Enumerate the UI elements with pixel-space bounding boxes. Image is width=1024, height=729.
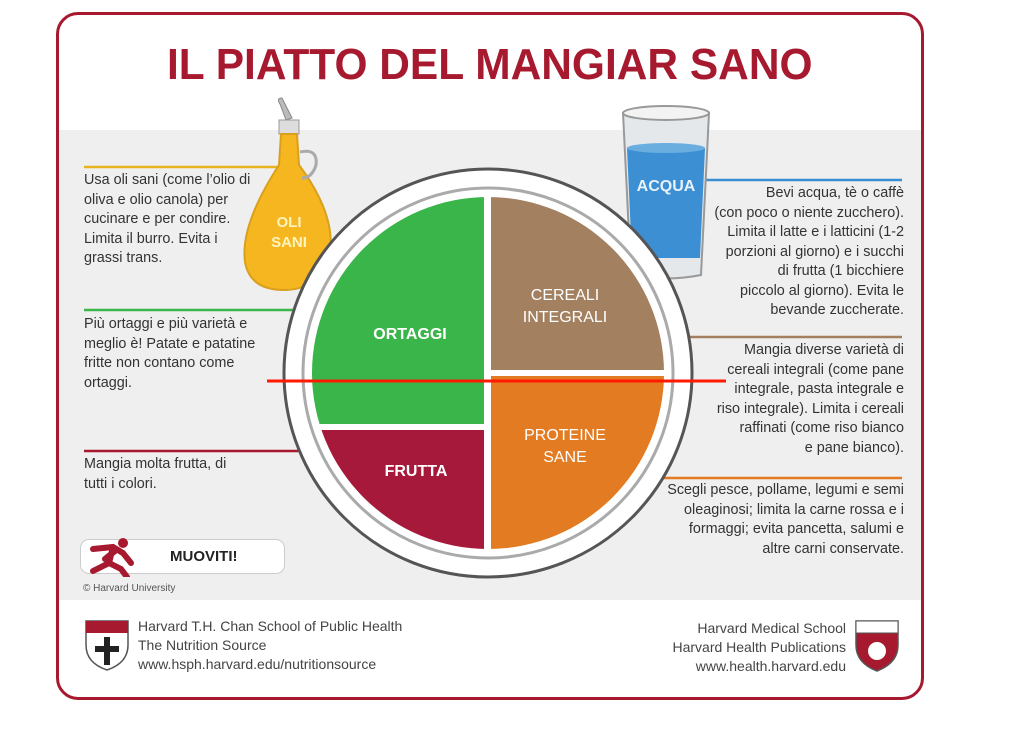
- leader lines: [84, 167, 902, 478]
- text: fruit: Mangia molta frutta, di: [84, 456, 226, 472]
- text: water: di frutta (1 bicchiere: [778, 263, 904, 279]
- text: oils: Limita il burro. Evita i: [84, 230, 218, 246]
- outer frame: [56, 12, 924, 700]
- text: water: piccolo al giorno). Evita le: [740, 282, 904, 298]
- text: vegetables: fritte non contano come: [84, 355, 234, 371]
- text: water: bevande zuccherate.: [770, 302, 904, 318]
- plate: CEREALI: [531, 287, 599, 304]
- text: fruit: tutti i colori.: [84, 476, 157, 492]
- text: protein: altre carni conservate.: [762, 540, 904, 556]
- footer left: [85, 618, 402, 672]
- plate: SANE: [543, 449, 587, 466]
- text: water: porzioni al giorno) e i succhi: [726, 244, 904, 260]
- text: vegetables: meglio è! Patate e patatine: [84, 336, 255, 352]
- text: oils: oliva e olio canola) per: [84, 192, 228, 208]
- icon: oil bottle: [244, 98, 331, 290]
- text: grains: [717, 342, 904, 456]
- plate: PROTEINE: [524, 427, 606, 444]
- icon: oil bottle: OLI: [276, 214, 302, 231]
- text: protein: formaggi; evita pancetta, salumi e: [689, 521, 904, 537]
- footer right: www.health.harvard.edu: [696, 658, 846, 674]
- text: oils: Usa oli sani (come l’olio di: [84, 172, 250, 188]
- title: IL PIATTO DEL MANGIAR SANO: [167, 40, 813, 89]
- footer left: Harvard T.H. Chan School of Public Health: [138, 618, 402, 634]
- text: grains: integrale, pasta integrale e: [734, 381, 904, 397]
- text: grains: riso integrale). Limita i cereali: [717, 400, 904, 416]
- footer left: www.hsph.harvard.edu/nutritionsource: [138, 656, 376, 672]
- plate: ORTAGGI: [373, 326, 447, 343]
- plate: INTEGRALI: [523, 309, 607, 326]
- text: vegetables: ortaggi.: [84, 374, 132, 390]
- plate: [284, 169, 692, 577]
- text: grains: Mangia diverse varietà di: [744, 342, 904, 358]
- text: fruit: [84, 456, 226, 492]
- muoviti badge: [80, 539, 285, 574]
- plate: FRUTTA: [385, 463, 448, 480]
- text: water: Bevi acqua, tè o caffè: [766, 185, 904, 201]
- red annotation line: [267, 380, 726, 382]
- footer left: The Nutrition Source: [138, 637, 266, 653]
- icon: oil bottle: SANI: [271, 234, 307, 251]
- text: protein: Scegli pesce, pollame, legumi e semi: [667, 482, 904, 498]
- text: protein: [667, 482, 904, 556]
- text: vegetables: Più ortaggi e più varietà e: [84, 316, 247, 332]
- icon: water glass: ACQUA: [637, 178, 696, 195]
- text: oils: cucinare e per condire.: [84, 211, 230, 227]
- text: water: (con poco o niente zucchero).: [714, 204, 904, 220]
- text: water: Limita il latte e i latticini (1-2: [727, 224, 904, 240]
- icon: shield right: [855, 620, 899, 672]
- footer right: [672, 620, 899, 674]
- icon: shield left: [85, 620, 129, 671]
- muoviti badge: MUOVITI!: [170, 548, 238, 565]
- text: grains: raffinati (come riso bianco: [739, 420, 904, 436]
- footer right: Harvard Medical School: [697, 620, 846, 636]
- copyright: © Harvard University: [83, 583, 175, 594]
- text: grains: cereali integrali (come pane: [727, 362, 904, 378]
- icon: runner: [90, 538, 134, 577]
- icon: water glass: [623, 106, 709, 278]
- text: oils: [84, 172, 250, 266]
- text: vegetables: [84, 316, 255, 390]
- text: oils: grassi trans.: [84, 250, 162, 266]
- text: water: [714, 185, 904, 318]
- text: grains: e pane bianco).: [805, 440, 904, 456]
- text: protein: oleaginosi; limita la carne rossa e i: [684, 502, 904, 518]
- footer right: Harvard Health Publications: [672, 639, 846, 655]
- main illustration: [84, 98, 902, 578]
- gray band: [59, 130, 921, 600]
